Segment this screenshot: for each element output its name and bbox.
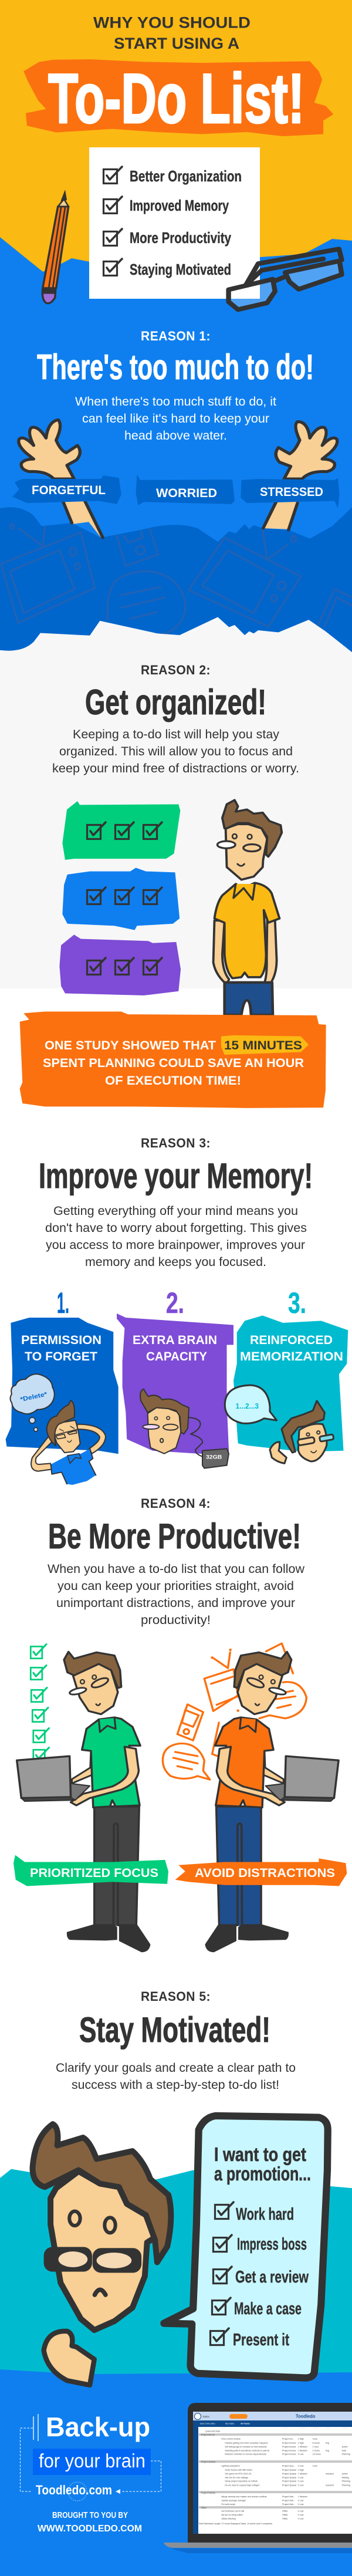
laptop with Toodledo screenshot: Project Aurora	[201, 2434, 215, 2436]
laptop with Toodledo screenshot: 2 High	[298, 2442, 304, 2444]
speech bubble: promotion checklist: Present it	[233, 2331, 289, 2349]
character: man with 1..2..3 speech bubble	[225, 1385, 334, 1463]
laptop with Toodledo screenshot: 0 Low	[298, 2464, 304, 2467]
laptop with Toodledo screenshot: Office	[282, 2510, 287, 2513]
laptop with Toodledo screenshot: bug	[326, 2442, 329, 2444]
laptop with Toodledo screenshot: Fix build script	[221, 2503, 235, 2506]
label: prioritized focus: PRIORITIZED FOCUS	[30, 1866, 158, 1880]
panel: 3 reinforced memorization: REINFORCED	[250, 1333, 333, 1347]
panel: 1 permission to forget: TO FORGET	[25, 1349, 97, 1363]
panel: 3 reinforced memorization	[233, 1287, 348, 1452]
checklist card	[89, 147, 260, 299]
laptop with Toodledo screenshot: 2 hours	[313, 2449, 320, 2452]
character: man in yellow shirt	[214, 800, 282, 1015]
laptop with Toodledo screenshot: Planning	[342, 2453, 350, 2456]
speech bubble: promotion checklist: Work hard	[236, 2205, 294, 2224]
heading: reason 1	[37, 329, 314, 387]
checklist card: More Productivity	[130, 229, 231, 247]
laptop with Toodledo screenshot: All Tasks	[241, 2423, 250, 2425]
character: man with brain drive: 32GB	[206, 1454, 222, 1460]
callout: study statistic banner: SPENT PLANNING COULD SAVE AN HOUR	[43, 1056, 304, 1070]
laptop with Toodledo screenshot: 0 Low	[298, 2484, 304, 2486]
text: brought to you by: WWW.TOODLEDO.COM	[38, 2524, 142, 2534]
laptop with Toodledo screenshot: 1 Medium	[298, 2473, 307, 2475]
laptop with Toodledo screenshot: Tag	[326, 2427, 329, 2429]
checklist card: Better Organization	[130, 167, 242, 185]
laptop with Toodledo screenshot: Priority	[298, 2427, 305, 2429]
heading: reason 5: Stay Motivated!	[79, 2010, 270, 2050]
laptop with Toodledo screenshot: 2 High	[298, 2469, 304, 2471]
callout: study statistic banner: ONE STUDY SHOWED THAT	[45, 1038, 216, 1052]
label: prioritized focus	[13, 1855, 168, 1886]
laptop with Toodledo screenshot: 0 Low	[298, 2517, 304, 2520]
heading: reason 1: REASON 1:	[141, 329, 211, 343]
logo: back-up for your brain: for your brain	[39, 2450, 145, 2472]
background: blue wave section	[0, 237, 352, 613]
logo: back-up for your brain: Back-up	[46, 2412, 150, 2442]
laptop with Toodledo screenshot: Project Qua...	[282, 2464, 295, 2467]
laptop with Toodledo screenshot: Total Estimated Length: 27 hours Displayed Tasks: 14 active and 0 completed	[198, 2523, 272, 2525]
laptop with Toodledo screenshot: Merge develop into master and resolve conflicts	[221, 2496, 267, 2498]
laptop with Toodledo screenshot: Length	[313, 2427, 319, 2429]
laptop with Toodledo screenshot: 0 Low	[298, 2503, 304, 2506]
heading: reason 3	[39, 1136, 313, 1196]
laptop with Toodledo screenshot: 1 hour	[313, 2446, 319, 2448]
character: man with 1..2..3 speech bubble: 1...2...3	[236, 1402, 259, 1410]
text: reason 3 body: don't have to worry about forgetting. This gives	[45, 1221, 307, 1235]
heading: reason 2: REASON 2:	[141, 663, 211, 677]
laptop with Toodledo screenshot: Get specs for RTD-2021-03	[225, 2473, 251, 2475]
laptop with Toodledo screenshot: Project Quasar	[282, 2476, 297, 2479]
laptop with Toodledo screenshot: 0 Low	[298, 2514, 304, 2516]
laptop with Toodledo screenshot: Active	[342, 2446, 348, 2448]
laptop with Toodledo screenshot: Sara Chen (Me)	[200, 2423, 215, 2425]
laptop with Toodledo screenshot: Project Nebula	[201, 2491, 216, 2494]
laptop with Toodledo screenshot: My turn to bring coffee	[221, 2514, 243, 2516]
laptop with Toodledo screenshot: Lighting subsystem	[221, 2464, 240, 2467]
laptop with Toodledo screenshot: Office	[282, 2514, 287, 2516]
laptop with Toodledo screenshot: none	[313, 2464, 317, 2467]
laptop with Toodledo screenshot: Hold	[342, 2449, 346, 2452]
text: reason 5 body: Clarify your goals and create a clear path to	[56, 2061, 296, 2075]
laptop with Toodledo screenshot: My Tasks	[225, 2423, 234, 2425]
laptop with Toodledo screenshot: 1 Medium	[298, 2496, 307, 2498]
icon: right hand reaching out of water	[263, 422, 337, 530]
laptop with Toodledo screenshot: Folder	[282, 2427, 289, 2429]
logo: back-up for your brain	[20, 2412, 161, 2501]
callout: study statistic banner	[20, 1012, 326, 1108]
laptop with Toodledo screenshot: Refactor controller to remove dependencies	[225, 2453, 266, 2456]
laptop with Toodledo screenshot: Status	[342, 2427, 348, 2429]
text: brought to you by	[38, 2511, 142, 2534]
title: why you should start using a: START USING A	[114, 35, 239, 52]
text: reason 4 body: productivity!	[141, 1613, 211, 1627]
heading: reason 3: REASON 3:	[141, 1136, 211, 1150]
laptop with Toodledo screenshot: Project Neb...	[282, 2499, 295, 2501]
text: reason 3 body: you access to more brainpower, improves your	[46, 1238, 305, 1252]
panel: 1 permission to forget: 1.	[57, 1287, 69, 1319]
laptop with Toodledo screenshot: Waiting	[342, 2476, 349, 2479]
icons: orange distractions	[163, 1643, 306, 1780]
label: forgetful	[12, 475, 121, 504]
laptop with Toodledo screenshot: Project Neb...	[282, 2503, 295, 2506]
panel: 3 reinforced memorization: 3.	[288, 1287, 306, 1319]
laptop with Toodledo screenshot: Project Quasar	[201, 2461, 216, 2463]
icon: left hand reaching out of water	[19, 420, 103, 538]
laptop with Toodledo screenshot: 1 Medium	[298, 2446, 307, 2448]
heading: reason 5	[79, 1989, 270, 2050]
laptop with Toodledo screenshot: Project Neb...	[282, 2496, 295, 2498]
character: big thinking face	[32, 2124, 171, 2385]
text: reason 5 body: success with a step-by-step to-do list!	[72, 2078, 279, 2092]
laptop with Toodledo screenshot: 0 Low	[298, 2476, 304, 2479]
character: man with green shirt and laptop	[17, 1652, 150, 1952]
label: avoid distractions	[175, 1858, 347, 1886]
background: blue footer	[0, 2369, 352, 2576]
laptop with Toodledo screenshot: Status Meeting	[221, 2517, 236, 2520]
text: brought to you by: BROUGHT TO YOU BY	[52, 2511, 128, 2520]
text: reason 4 body: unimportant distractions, and improve your	[56, 1596, 295, 1610]
icon: glasses	[229, 249, 341, 309]
laptop with Toodledo screenshot: Packets getting lost when exception happens	[225, 2442, 268, 2444]
laptop with Toodledo screenshot: Setup project repository on Github	[225, 2480, 258, 2483]
laptop with Toodledo screenshot: Project Aurora	[282, 2449, 296, 2452]
text: reason 1 body	[75, 395, 276, 443]
heading: reason 2: Get organized!	[85, 683, 266, 722]
laptop with Toodledo screenshot: Get freshcare out in hall	[221, 2510, 244, 2513]
heading: reason 4	[48, 1496, 301, 1556]
laptop with Toodledo screenshot: Get debug logs to Humans on new sessions	[225, 2446, 267, 2448]
dark blue water with sunken objects	[0, 507, 352, 652]
checklist card: Improved Memory	[130, 197, 229, 214]
label: forgetful: FORGETFUL	[32, 483, 106, 497]
laptop with Toodledo screenshot: Do we need to support high voltage?	[225, 2484, 260, 2486]
label: stressed: STRESSED	[260, 485, 323, 499]
text: reason 5 body	[56, 2061, 296, 2092]
laptop with Toodledo screenshot: Flow control module	[221, 2437, 241, 2440]
title: why you should start using a: WHY YOU SHOULD	[93, 14, 251, 32]
label: worried: WORRIED	[156, 486, 217, 500]
background: teal brush	[0, 2169, 352, 2374]
text: reason 4 body	[48, 1562, 305, 1627]
callout: study statistic banner: OF EXECUTION TIME!	[105, 1073, 241, 1088]
speech bubble: promotion checklist: Get a review	[235, 2268, 309, 2287]
laptop with Toodledo screenshot: Quick Add Task	[205, 2430, 220, 2433]
laptop with Toodledo screenshot: Planning	[342, 2480, 350, 2483]
laptop with Toodledo screenshot: Office	[282, 2517, 287, 2520]
speech bubble: promotion checklist: Impress boss	[237, 2235, 307, 2254]
character: man with hands behind head and delete thought: *Delete*	[19, 1390, 48, 1403]
text: reason 3 body: memory and keeps you focused.	[85, 1255, 266, 1269]
text: reason 1 body: can feel like it's hard to keep your	[82, 412, 269, 426]
heading: reason 5: REASON 5:	[141, 1989, 211, 2004]
character: man with brain drive	[140, 1389, 229, 1468]
laptop with Toodledo screenshot: 0 Low	[298, 2510, 304, 2513]
laptop with Toodledo screenshot: Order Aurora with Wifi shield	[225, 2469, 252, 2471]
laptop with Toodledo screenshot: none	[313, 2437, 317, 2440]
laptop with Toodledo screenshot: Project Quasar	[282, 2480, 297, 2483]
panel: 1 permission to forget	[6, 1287, 119, 1454]
laptop with Toodledo screenshot: Toodledo	[296, 2413, 315, 2419]
panel: 2 extra brain capacity: EXTRA BRAIN	[133, 1333, 217, 1347]
logo: back-up for your brain: Toodledo.com	[36, 2483, 112, 2497]
icons: green checkbox stack	[31, 1644, 49, 1762]
speech bubble: promotion checklist: I want to get	[214, 2143, 306, 2165]
laptop with Toodledo screenshot: 1 Medium	[298, 2449, 307, 2452]
text: reason 2 body	[52, 728, 299, 775]
laptop with Toodledo screenshot: Planning	[342, 2484, 350, 2486]
laptop with Toodledo screenshot: 16 hours	[313, 2453, 321, 2456]
laptop with Toodledo screenshot: Project Quasar	[282, 2473, 297, 2475]
laptop with Toodledo screenshot: research	[326, 2473, 334, 2475]
text: reason 3 body	[45, 1204, 307, 1269]
label: worried	[136, 475, 235, 505]
laptop with Toodledo screenshot: research	[326, 2484, 334, 2486]
panel: blue checklist block	[62, 868, 180, 930]
laptop with Toodledo screenshot: Update package manager	[221, 2499, 246, 2501]
text: reason 4 body: When you have a to-do list that you can follow	[48, 1562, 305, 1576]
heading: reason 4: REASON 4:	[141, 1496, 211, 1511]
laptop with Toodledo screenshot	[164, 2403, 352, 2553]
character: man with orange shirt and laptop	[205, 1652, 339, 1952]
icon: pencil	[42, 190, 69, 303]
panel: 2 extra brain capacity: CAPACITY	[146, 1349, 207, 1363]
background: yellow header	[0, 0, 352, 329]
laptop with Toodledo screenshot: Project Aurora	[282, 2446, 296, 2448]
laptop with Toodledo screenshot: 0 Low	[298, 2480, 304, 2483]
text: reason 1 body: head above water.	[124, 429, 227, 443]
speech bubble: promotion checklist: a promotion...	[214, 2163, 311, 2185]
laptop with Toodledo screenshot: Project Aurora	[282, 2453, 296, 2456]
text: reason 1 body: When there's too much stuff to do, it	[75, 395, 276, 408]
laptop with Toodledo screenshot: Project Quasar	[282, 2469, 297, 2471]
background: light grey section	[0, 610, 352, 988]
text: reason 3 body: Getting everything off your mind means you	[53, 1204, 298, 1218]
panel: 2 extra brain capacity	[117, 1287, 233, 1454]
text: reason 2 body: Keeping a to-do list will help you stay	[73, 728, 280, 741]
laptop with Toodledo screenshot: Ask Jim for max wattage	[225, 2476, 248, 2479]
label: stressed	[241, 478, 340, 508]
title: why you should start using a	[93, 14, 251, 52]
panel: 3 reinforced memorization: MEMORIZATION	[240, 1349, 343, 1363]
laptop with Toodledo screenshot: Office	[201, 2507, 207, 2509]
laptop with Toodledo screenshot: Active	[342, 2473, 348, 2475]
laptop with Toodledo screenshot: Selecting path A sometimes redirects to path B	[225, 2449, 269, 2452]
checklist card: Staying Motivated	[130, 261, 231, 278]
laptop with Toodledo screenshot: Project Aur...	[282, 2437, 295, 2440]
laptop with Toodledo screenshot: 8 hours	[313, 2442, 320, 2444]
character: man with hands behind head and delete thought	[10, 1374, 106, 1485]
laptop with Toodledo screenshot: Project Aurora	[282, 2442, 296, 2444]
speech bubble: promotion checklist	[164, 2116, 328, 2378]
text: reason 2 body: keep your mind free of distractions or worry.	[52, 762, 299, 775]
callout: study statistic banner: 15 MINUTES	[224, 1038, 302, 1052]
label: avoid distractions: AVOID DISTRACTIONS	[195, 1866, 335, 1880]
panel: green checklist block	[62, 801, 180, 860]
laptop with Toodledo screenshot: Project Quasar	[282, 2484, 297, 2486]
laptop with Toodledo screenshot: Tasks	[202, 2415, 210, 2418]
speech bubble: promotion checklist: Make a case	[234, 2300, 302, 2318]
panel: 1 permission to forget: PERMISSION	[21, 1333, 101, 1347]
text: reason 4 body: you can keep your priorities straight, avoid	[57, 1579, 294, 1593]
laptop with Toodledo screenshot: 0 Low	[298, 2499, 304, 2501]
laptop with Toodledo screenshot: 2 High	[298, 2437, 304, 2440]
heading: reason 2	[85, 663, 266, 722]
text: reason 2 body: organized. This will allow you to focus and	[59, 745, 293, 758]
laptop with Toodledo screenshot: bug	[326, 2449, 329, 2452]
panel: 2 extra brain capacity: 2.	[166, 1287, 184, 1319]
laptop with Toodledo screenshot: 0 Low	[298, 2453, 304, 2456]
panel: purple checklist block	[59, 934, 181, 995]
laptop with Toodledo screenshot: Task	[221, 2427, 226, 2429]
